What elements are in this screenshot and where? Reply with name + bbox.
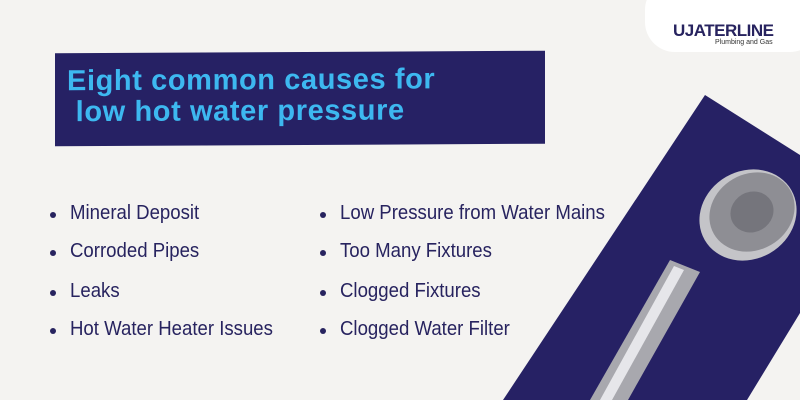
title: Eight common causes for — [67, 63, 435, 97]
title — [67, 63, 435, 128]
list: left column: Hot Water Heater Issues — [70, 318, 273, 340]
title: low hot water pressure — [76, 94, 405, 128]
list: right column: Too Many Fixtures — [340, 240, 492, 262]
list: right column: Clogged Fixtures — [340, 280, 481, 302]
logo — [645, 0, 800, 52]
title box — [55, 51, 545, 146]
list: left column: Leaks — [70, 280, 120, 302]
logo: UJATERLINE — [673, 21, 773, 40]
list: left column: Corroded Pipes — [70, 240, 199, 262]
logo: Plumbing and Gas — [715, 39, 773, 46]
list: right column — [320, 202, 605, 340]
list: left column — [50, 202, 273, 340]
icon: shower head — [590, 152, 800, 400]
list: left column: Mineral Deposit — [70, 202, 199, 224]
list: right column: Low Pressure from Water Mains — [340, 202, 605, 224]
list: right column: Clogged Water Filter — [340, 318, 510, 340]
